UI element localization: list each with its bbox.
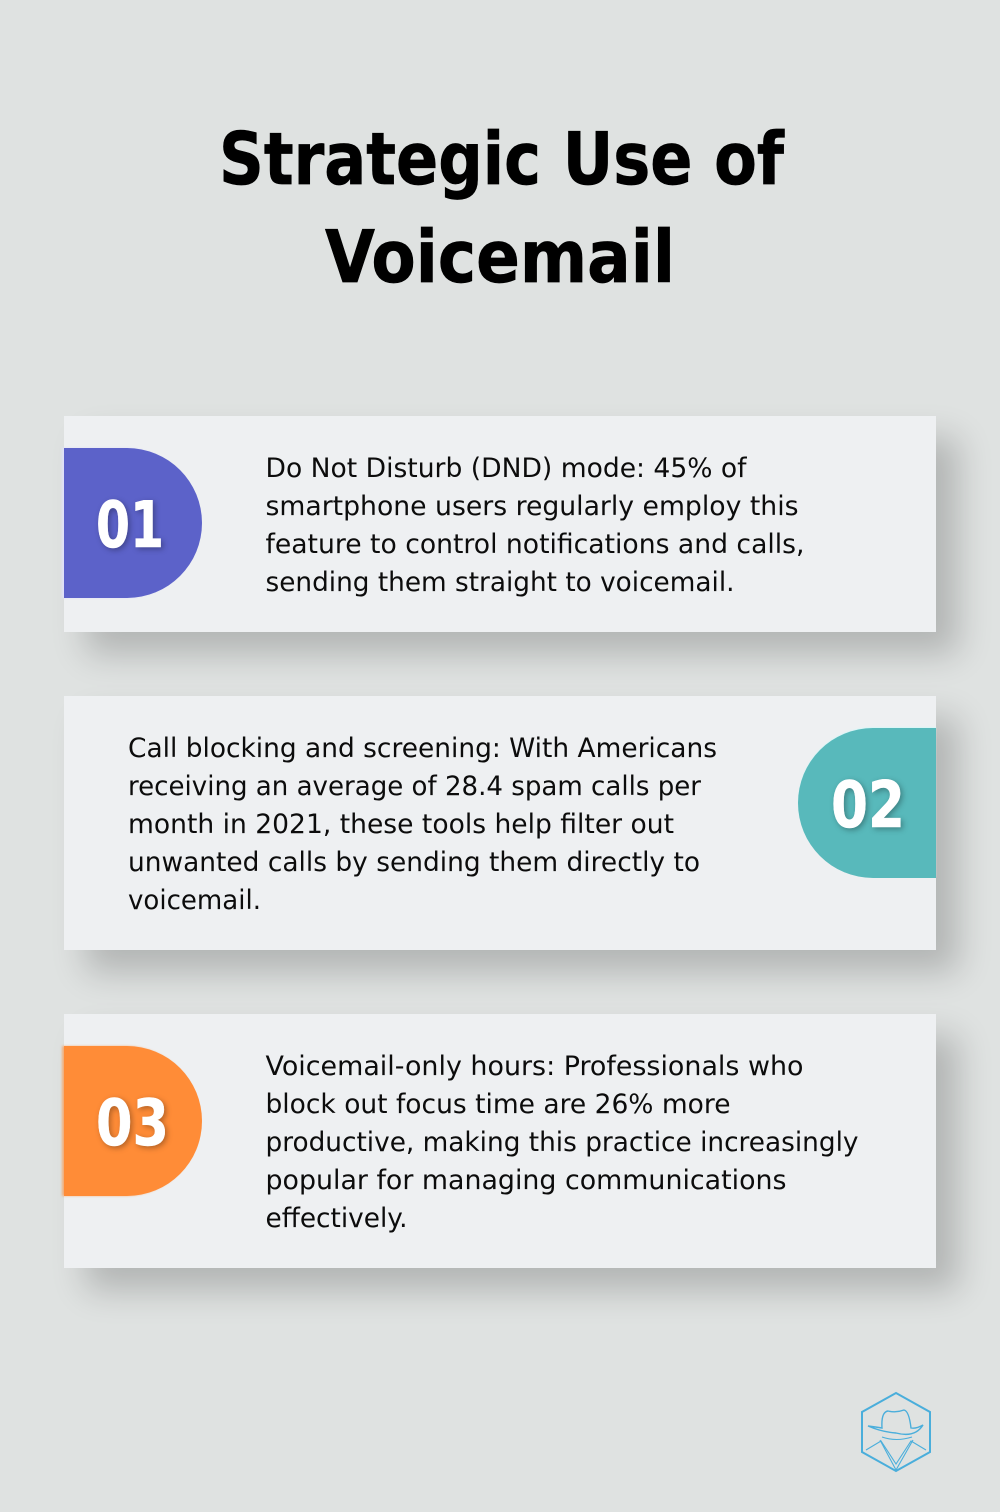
badge: 01: 01 [96, 489, 164, 563]
panel: card 2 [64, 696, 936, 950]
badge: 01 [64, 448, 202, 598]
title: Voicemail [325, 215, 675, 299]
badge: 02: 02 [831, 769, 905, 843]
text: DND mode: sending them straight to voicemail. [266, 567, 734, 598]
text: call blocking: receiving an average of 28.4 spam calls per [128, 771, 702, 802]
text: call blocking [128, 733, 717, 916]
text: voicemail-only hours: effectively. [266, 1203, 408, 1234]
text: DND mode: Do Not Disturb (DND) mode: 45% of [266, 453, 748, 484]
text: call blocking: unwanted calls by sending them directly to [128, 847, 700, 878]
text: call blocking: voicemail. [128, 885, 261, 916]
badge: 02 [798, 728, 936, 878]
panel: card 1 [64, 416, 936, 632]
text: voicemail-only hours: Voicemail-only hours: Professionals who [266, 1051, 804, 1082]
text: DND mode: smartphone users regularly employ this [266, 491, 798, 522]
panel: card 3 [64, 1014, 936, 1268]
title: Strategic Use of [219, 117, 785, 201]
badge: 03 [64, 1046, 202, 1196]
text: voicemail-only hours: productive, making this practice increasingly [266, 1127, 859, 1158]
text: DND mode: feature to control notifications and calls, [266, 529, 804, 560]
text: DND mode [266, 453, 804, 598]
text: call blocking: month in 2021, these tools help filter out [128, 809, 674, 840]
text: voicemail-only hours: block out focus time are 26% more [266, 1089, 730, 1120]
text: call blocking: Call blocking and screening: With Americans [128, 733, 717, 764]
badge: 03: 03 [96, 1087, 169, 1161]
text: voicemail-only hours [266, 1051, 859, 1234]
title [219, 117, 785, 299]
text: voicemail-only hours: popular for managing communications [266, 1165, 786, 1196]
